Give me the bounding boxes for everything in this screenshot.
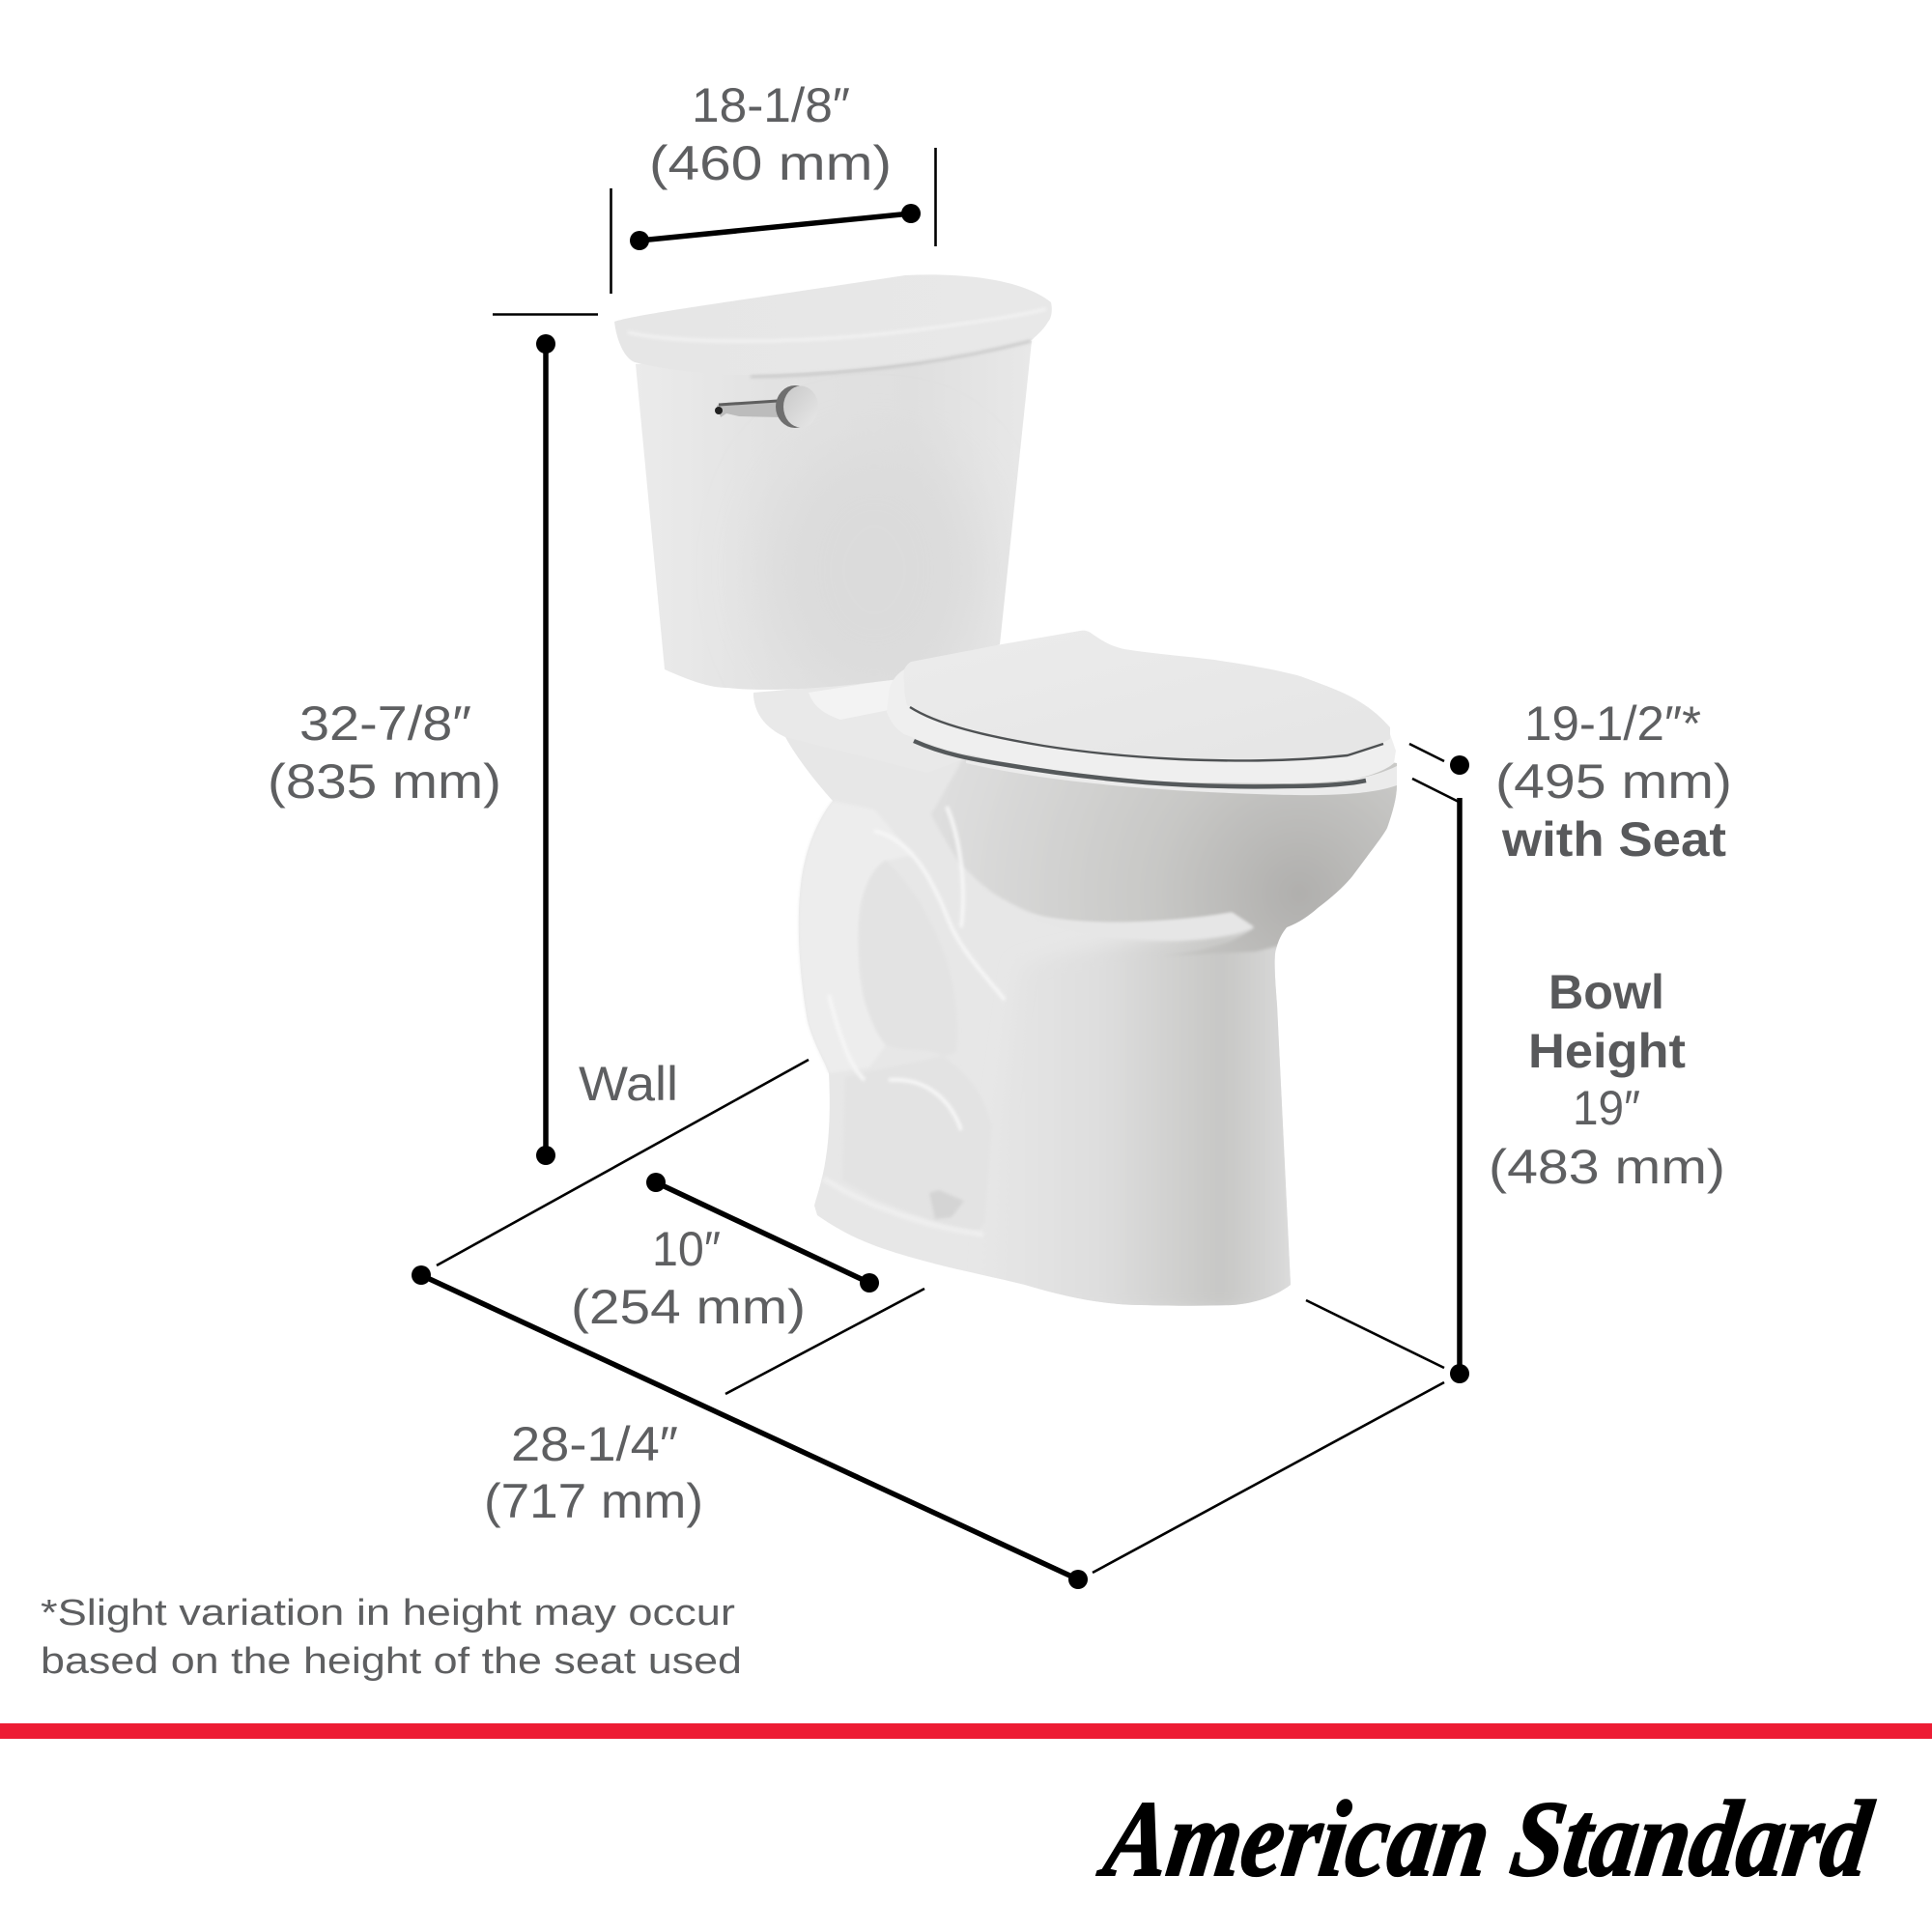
dark seat gap	[914, 741, 1366, 786]
connection neck	[753, 678, 966, 773]
bowl shading	[934, 755, 1397, 952]
label: depth: (717 mm)	[484, 1474, 703, 1528]
label: height with seat	[1495, 696, 1732, 867]
label: total height	[268, 696, 501, 809]
label: wall: Wall	[579, 1057, 678, 1111]
label: rough-in: 10″	[652, 1222, 721, 1276]
tank lid	[614, 274, 1052, 375]
tank body	[636, 341, 1032, 690]
footnote	[41, 1593, 742, 1682]
label: tank width	[649, 78, 892, 190]
pedestal shading	[1032, 929, 1291, 1306]
base foot edge	[823, 1179, 983, 1235]
bowl highlight	[1025, 913, 1254, 941]
bowl rim band	[966, 758, 1397, 795]
tank soft shading	[768, 444, 980, 696]
label: bowl height	[1489, 965, 1725, 1194]
label: total height: (835 mm)	[268, 754, 501, 809]
label: height with seat: with Seat	[1501, 812, 1726, 867]
bridge highlight	[809, 679, 894, 720]
label: bowl height: Bowl	[1548, 965, 1664, 1019]
label: bowl height: (483 mm)	[1489, 1140, 1725, 1194]
label: height with seat: 19-1/2″*	[1524, 696, 1701, 751]
footnote: *Slight variation in height may occur	[41, 1593, 735, 1634]
label: bowl height: Height	[1528, 1024, 1686, 1078]
toilet illustration	[614, 274, 1439, 1314]
lid top edge shading	[628, 309, 1046, 341]
flush lever	[715, 385, 818, 428]
lid shadow	[751, 341, 1031, 377]
dimension: depth line	[412, 1265, 1088, 1589]
dimension: seat and bowl height lines	[1409, 744, 1469, 1383]
bowl and base body	[753, 693, 1397, 1306]
trapway curve highlights	[829, 807, 1005, 1130]
seat shadow edge	[910, 707, 1383, 760]
seat lid	[904, 631, 1390, 760]
label: rough-in: (254 mm)	[571, 1280, 806, 1334]
dimension: tank width lines	[493, 148, 935, 315]
bolt cap	[929, 1190, 964, 1219]
label: bowl height: 19″	[1573, 1081, 1640, 1135]
red divider band	[0, 1723, 1932, 1739]
label: total height: 32-7/8″	[299, 696, 471, 751]
label: tank width: (460 mm)	[649, 136, 892, 190]
trapway arch	[799, 801, 913, 1073]
label: depth: 28-1/4″	[511, 1417, 678, 1471]
footnote: based on the height of the seat used	[41, 1641, 742, 1682]
floor guide lines	[437, 1060, 1444, 1573]
dimension: total height line	[536, 334, 555, 1165]
dimension: rough-in line	[646, 1173, 879, 1293]
label: rough-in	[571, 1222, 806, 1334]
label: height with seat: (495 mm)	[1495, 754, 1732, 809]
label: depth	[484, 1417, 703, 1528]
trapway panel	[842, 861, 992, 1233]
seat ring	[887, 669, 1396, 783]
label: tank width: 18-1/8″	[692, 78, 850, 132]
